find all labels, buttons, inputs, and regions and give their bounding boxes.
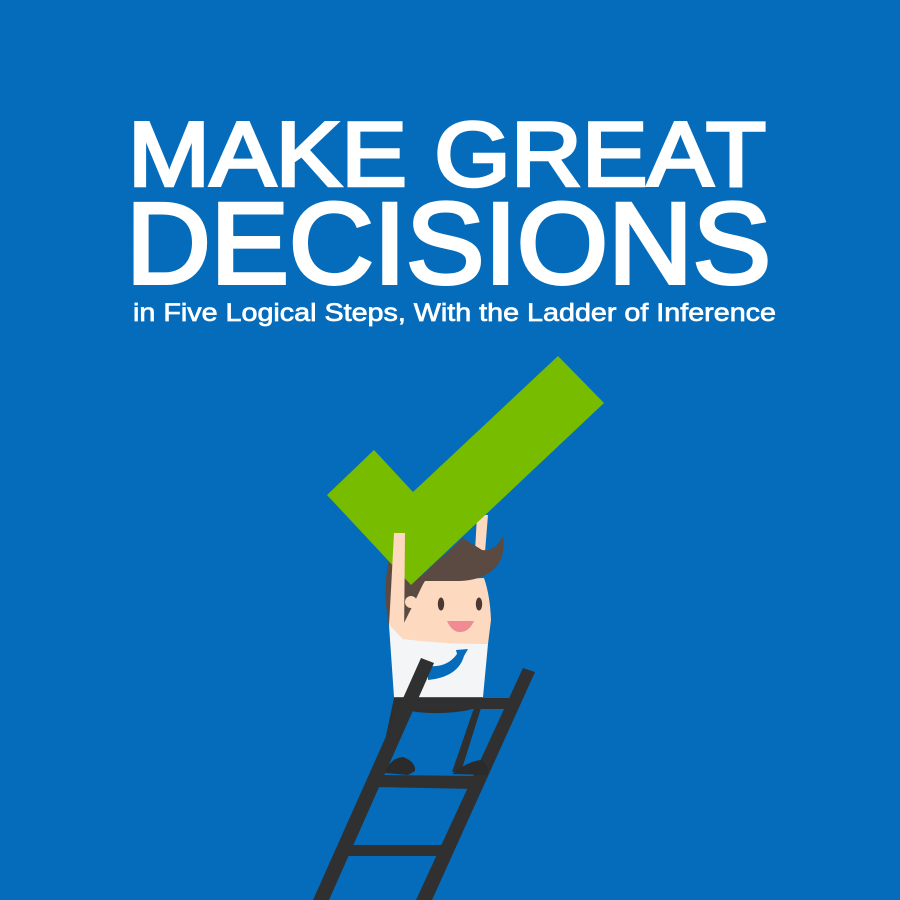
heading: make great: MAKE GREAT	[128, 104, 766, 206]
head	[403, 578, 491, 644]
hair top	[411, 536, 504, 592]
right arm	[475, 515, 488, 552]
title	[126, 104, 776, 327]
illustration: businessman on ladder	[313, 356, 604, 900]
shirt	[389, 625, 488, 697]
legs	[384, 698, 490, 772]
mouth	[447, 621, 474, 632]
ladder	[313, 658, 535, 900]
hair back	[386, 560, 430, 626]
tie	[428, 649, 468, 680]
heading: decisions: DECISIONS	[126, 180, 771, 308]
shoes	[385, 757, 488, 775]
subtitle: in Five Logical Steps, With the Ladder of Inference	[133, 299, 776, 327]
ear	[405, 596, 417, 608]
left arm	[389, 533, 405, 640]
check mark	[327, 356, 604, 585]
eyes	[438, 598, 482, 610]
